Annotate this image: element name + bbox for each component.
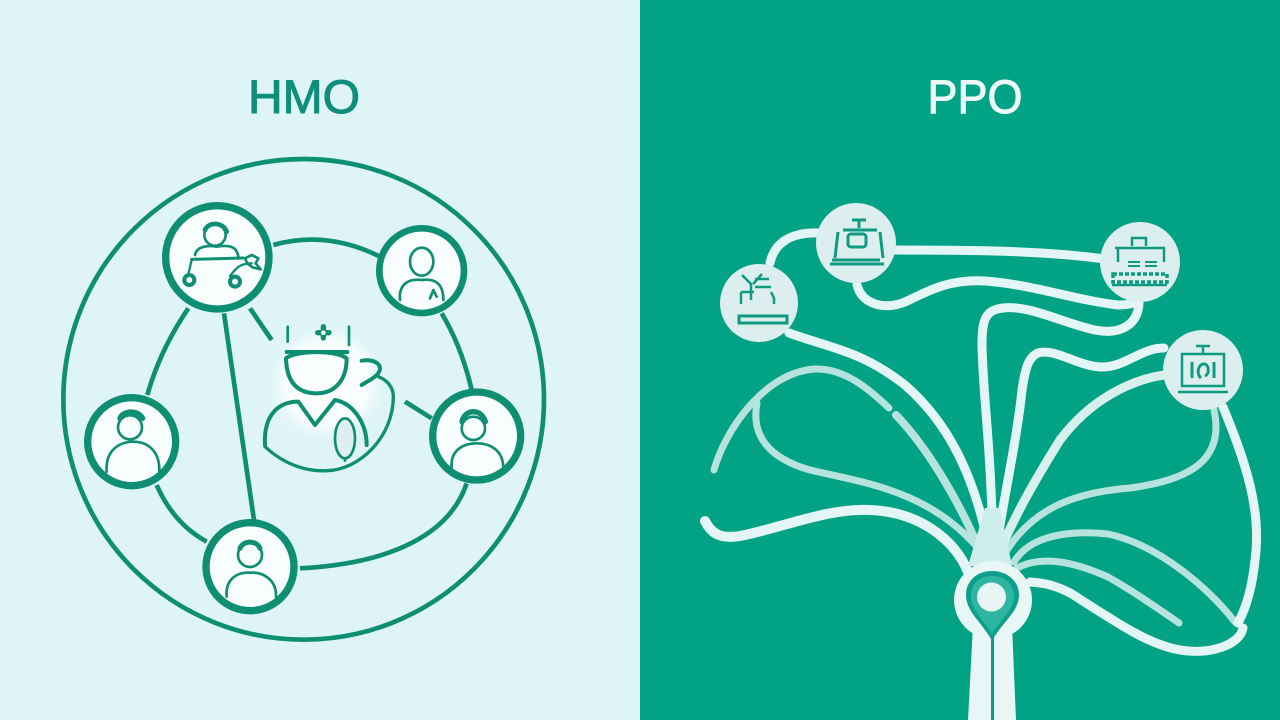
central doctor icon — [262, 318, 393, 471]
PPO provider node 3 — [1100, 222, 1180, 302]
merged trunk of pathways above the pin — [968, 508, 1012, 566]
location pin hub — [954, 561, 1032, 720]
panel: PPO — [640, 0, 1280, 720]
flexible pathways to the pin — [705, 233, 1257, 651]
pale background pathways — [714, 369, 1235, 623]
provider node: top right — [379, 228, 466, 315]
connecting lines between providers — [147, 240, 472, 568]
panel: HMO — [0, 0, 640, 720]
PPO provider node 1 — [720, 264, 798, 342]
provider node: left — [88, 398, 178, 488]
PPO provider node 4 — [1163, 330, 1243, 410]
heading: HMO: HMO — [248, 70, 360, 123]
provider node: right — [433, 392, 523, 483]
PPO provider node 2 — [816, 203, 896, 283]
pin marker — [966, 571, 1019, 641]
heading: PPO: PPO — [928, 70, 1022, 123]
outer network boundary circle — [63, 159, 544, 640]
provider node: top left — [166, 206, 272, 312]
bright pathways — [705, 233, 1257, 651]
diagram: closed HMO network — [63, 159, 544, 640]
provider node: bottom — [206, 523, 297, 613]
